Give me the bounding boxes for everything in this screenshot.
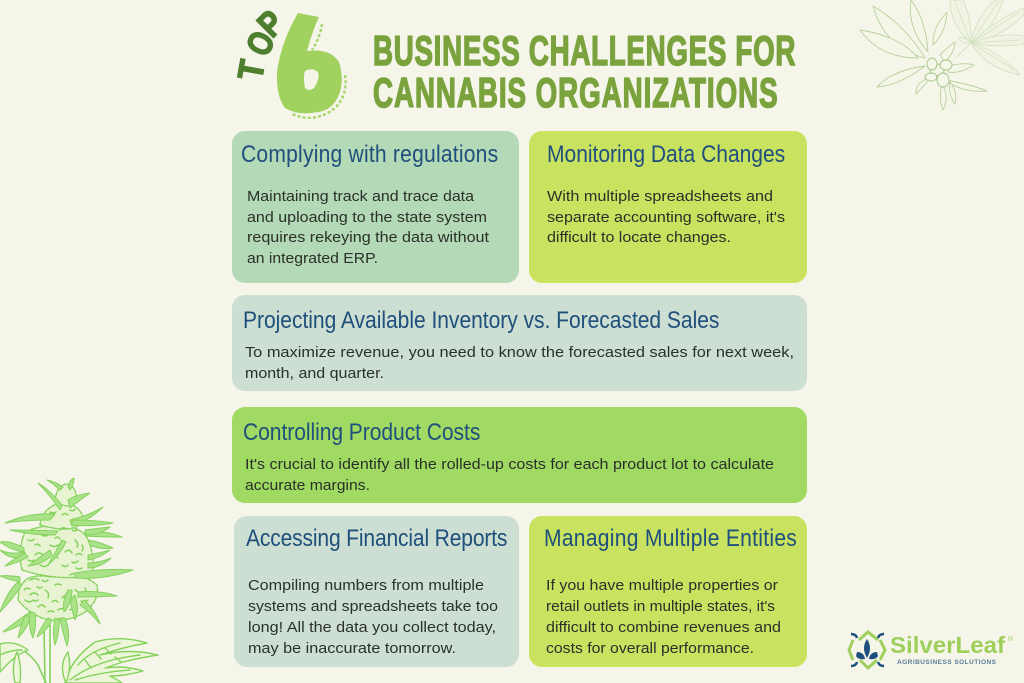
logo: SilverLeaf: SilverLeaf (890, 632, 1005, 658)
panel: monitoring data changes: With multiple spreadsheets and (547, 188, 773, 205)
panel: managing multiple entities: costs for overall performance. (546, 640, 754, 657)
panel: monitoring data changes: Monitoring Data Changes (547, 139, 785, 167)
panel: managing multiple entities (529, 516, 807, 667)
panel: complying with regulations: Complying with regulations (241, 139, 498, 167)
left leaf cluster (0, 643, 28, 683)
panel: projecting available inventory: month, and quarter. (245, 365, 384, 382)
large lower right leaf (62, 639, 158, 683)
title: Top 6 badge (231, 3, 346, 118)
panel: monitoring data changes (529, 131, 807, 283)
panel: accessing financial reports: Compiling numbers from multiple (248, 577, 484, 594)
heading: CANNABIS ORGANIZATIONS (373, 69, 778, 117)
heading: BUSINESS CHALLENGES FOR (373, 27, 795, 75)
TOP arched label: O (238, 24, 283, 62)
panel: managing multiple entities: If you have multiple properties or (546, 577, 778, 594)
logo: SilverLeaf: AGRIBUSINESS SOLUTIONS (897, 659, 997, 666)
logo: SilverLeaf (849, 632, 1014, 668)
illustration: bottom left cannabis plant (0, 478, 158, 683)
panel: accessing financial reports: systems and spreadsheets take too (248, 598, 498, 615)
panel: projecting available inventory: Projecting Available Inventory vs. Forecasted Sales (243, 305, 719, 333)
panel: complying with regulations (232, 131, 519, 283)
panel: managing multiple entities: Managing Multiple Entities (544, 523, 797, 551)
spiky leaves (0, 478, 133, 646)
panel: complying with regulations: Maintaining track and trace data (247, 188, 475, 205)
illustration: top right cannabis leaves (860, 0, 1024, 110)
panel: managing multiple entities: difficult to combine revenues and (546, 619, 781, 636)
panel: accessing financial reports: Accessing Financial Reports (246, 523, 507, 551)
heading (373, 27, 795, 117)
logo: SilverLeaf: ® (1008, 635, 1014, 643)
stem and branches (0, 625, 50, 683)
panel: controlling product costs (232, 407, 807, 503)
panel: complying with regulations: an integrated ERP. (247, 250, 378, 267)
panel: monitoring data changes: separate accounting software, it's (547, 209, 785, 226)
logo icon (849, 632, 885, 668)
flower texture marks (24, 509, 88, 612)
panel: controlling product costs: accurate margins. (245, 477, 370, 494)
panel: accessing financial reports: may be inaccurate tomorrow. (248, 640, 456, 657)
big numeral shading (292, 24, 346, 118)
panel: accessing financial reports: long! All the data you collect today, (248, 619, 496, 636)
panel: controlling product costs: Controlling Product Costs (243, 417, 480, 445)
TOP arched label (231, 3, 291, 83)
flower clusters (18, 484, 98, 620)
TOP arched label: T (231, 57, 273, 83)
big numeral 6 (277, 13, 342, 113)
panel: managing multiple entities: retail outlets in multiple states, it's (546, 598, 775, 615)
TOP arched label: P (250, 3, 291, 44)
panel: complying with regulations: and uploading to the state system (247, 209, 487, 226)
panel: projecting available inventory: To maximize revenue, you need to know the forecasted sales for next week, (245, 344, 794, 361)
panel: complying with regulations: requires rekeying the data without (247, 229, 490, 246)
panel: projecting available inventory (232, 295, 807, 391)
panel: controlling product costs: It's crucial to identify all the rolled-up costs for each product lot to calculate (245, 456, 774, 473)
panel: monitoring data changes: difficult to locate changes. (547, 229, 731, 246)
panel: accessing financial reports (234, 516, 519, 667)
